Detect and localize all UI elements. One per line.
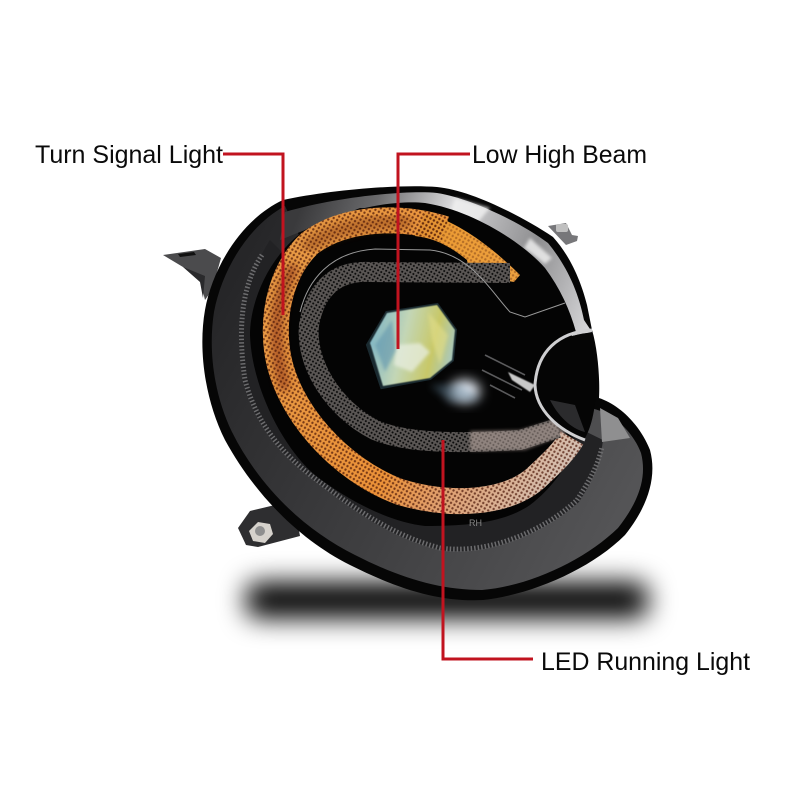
mounting lug: lower left bbox=[238, 505, 300, 547]
flange ridged strip bbox=[241, 255, 602, 549]
illustration: headlight assembly bbox=[163, 186, 652, 600]
black interior bbox=[250, 202, 576, 526]
printed marking RH: RH bbox=[469, 518, 482, 528]
lower right flange insert bbox=[600, 408, 630, 442]
drop shadow under headlight bbox=[246, 582, 648, 618]
callout: Turn Signal Light bbox=[35, 141, 283, 315]
grey LED running light ring bbox=[300, 249, 566, 451]
housing silhouette bbox=[202, 186, 652, 600]
callout: LED Running Light bbox=[443, 440, 750, 676]
amber turn signal ring bbox=[276, 213, 572, 501]
rim highlight bbox=[450, 198, 552, 264]
dark inner flange band bbox=[239, 240, 603, 551]
callout: Low High Beam bbox=[398, 141, 647, 349]
callout: Turn Signal Light: Turn Signal Light bbox=[35, 141, 223, 169]
interior reflections bbox=[430, 355, 545, 402]
silver lens rim bbox=[280, 192, 592, 336]
mounting bolt: upper right bbox=[548, 223, 578, 245]
grey outer flange bbox=[212, 206, 643, 590]
clear lens cut-out bbox=[535, 330, 596, 440]
callout: Low High Beam: Low High Beam bbox=[472, 141, 647, 169]
projector lens bbox=[368, 305, 455, 387]
callout: LED Running Light: LED Running Light bbox=[541, 648, 750, 676]
mounting bracket: upper left bbox=[163, 249, 221, 300]
